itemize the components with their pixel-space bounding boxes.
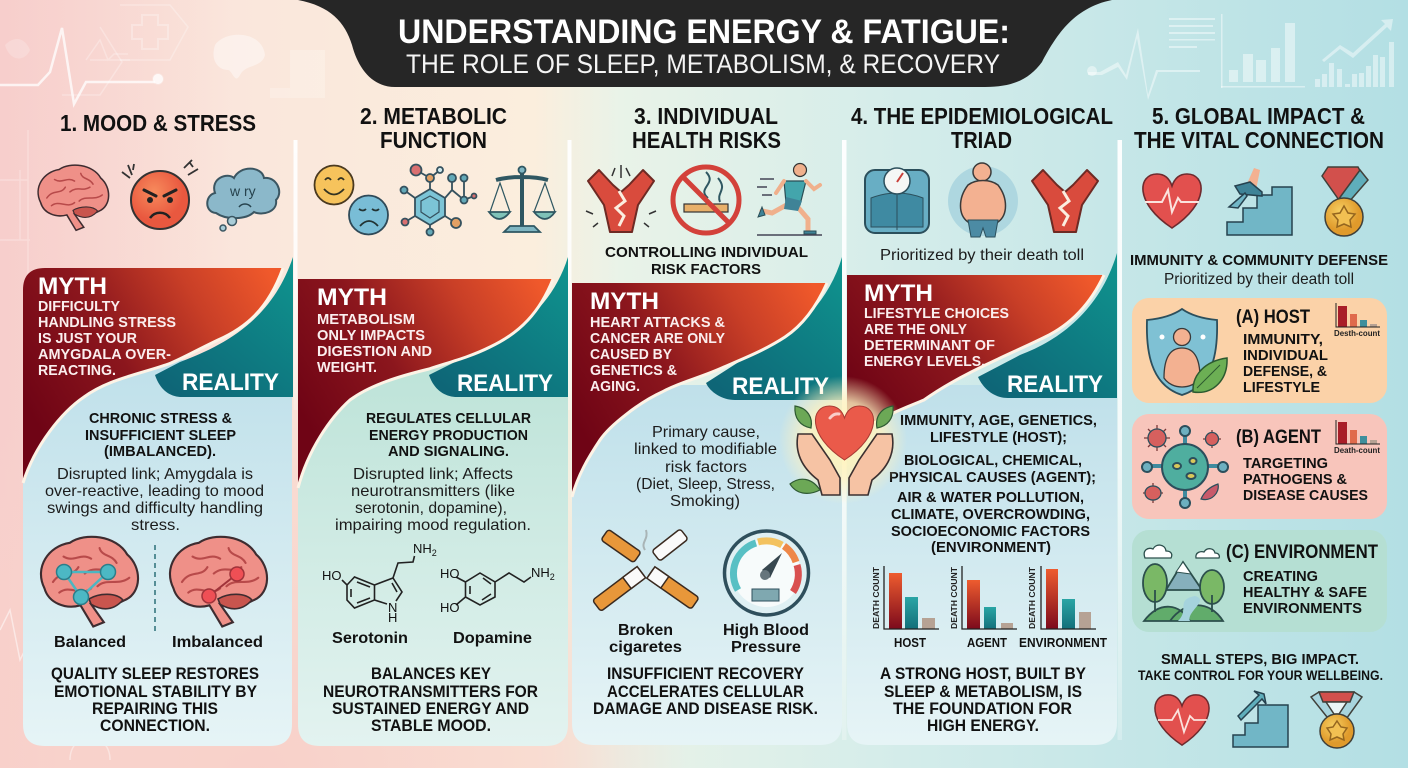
card text: environment [1243,568,1367,617]
reality text: REGULATES CELLULAR [366,410,531,427]
card text: host: INDIVIDUAL [1243,347,1328,364]
icon: brain [38,165,109,230]
reality text: ENERGY PRODUCTION [369,427,528,444]
icon: pathogens [1142,425,1228,508]
conclusion: HIGH ENERGY. [927,717,1039,735]
closing message: SMALL STEPS, BIG IMPACT. [1161,651,1359,668]
reality text: IMMUNITY, AGE, GENETICS, [900,412,1097,429]
reality text: CHRONIC STRESS & [89,410,232,427]
icon: balanced brain [41,537,138,627]
panel 5 heading [1134,103,1384,153]
reality text: neurotransmitters (like [351,483,515,500]
myth text: HANDLING STRESS [38,314,176,331]
reality text: stress. [131,517,180,534]
subheading: community defense [1130,252,1388,288]
subheading: risk factors: RISK FACTORS [651,261,761,278]
chart: environment: ENVIRONMENT [1019,635,1107,650]
chart: agent [950,566,1017,650]
myth text: WEIGHT. [317,359,377,376]
conclusion: NEUROTRANSMITTERS FOR [323,683,538,701]
mini chart: host: Desth-count [1334,329,1380,338]
subheading: risk factors [605,244,808,278]
conclusion: INSUFFICIENT RECOVERY [607,665,804,683]
myth label: MYTH [864,280,933,307]
diagram: dopamine: HO [440,600,460,615]
myth text: LIFESTYLE CHOICES [864,305,1009,322]
icon: runner [757,164,822,235]
card heading: host: (A) HOST [1236,307,1310,328]
card text: host [1243,331,1328,396]
myth text: DETERMINANT OF [864,337,995,354]
reality label: REALITY [457,370,553,397]
conclusion: SLEEP & METABOLISM, IS [884,683,1082,701]
myth text: ENERGY LEVELS. [864,353,985,370]
myth text: HEART ATTACKS & [590,314,725,331]
reality text: LIFESTYLE (HOST); [930,429,1067,446]
label: broken cigarettes: Broken [618,622,673,639]
diagram: dopamine [440,565,555,615]
panel 3 heading: 3. INDIVIDUAL [634,103,778,129]
icon: obese figure [948,163,1018,237]
reality text: impairing mood regulation. [335,517,531,534]
myth label: MYTH [38,273,107,300]
myth text: METABOLISM [317,311,415,328]
icon: molecule [400,164,476,236]
myth reality split [298,257,568,746]
reality text: CLIMATE, OVERCROWDING, [891,506,1090,523]
panel 4: the epidemiological triad [847,103,1117,745]
icon: no smoking [673,167,739,233]
mini chart: host [1334,303,1380,338]
card text: environment: CREATING [1243,568,1318,585]
myth reality split [847,253,1117,745]
myth text: CANCER ARE ONLY [590,330,725,347]
reality text [335,410,531,534]
card heading: agent: (B) AGENT [1236,427,1321,448]
myth text [38,298,176,379]
diagram: dopamine: HO [440,566,460,581]
diagram: serotonin: N [388,600,397,615]
panel 3 heading [632,103,781,153]
myth text: REACTING. [38,362,116,379]
reality text: swings and difficulty handling [47,500,263,517]
card text: agent: DISEASE CAUSES [1243,487,1368,504]
icon: shield [1147,309,1227,395]
reality text: AIR & WATER POLLUTION, [897,489,1084,506]
divider dashed [154,545,156,632]
reality text: risk factors [665,459,747,476]
reality label: REALITY [1007,371,1103,398]
decorative chart line art: top right [1087,14,1394,100]
subheading: community defense: Prioritized by their death toll [1164,271,1354,288]
conclusion: STABLE MOOD. [371,717,491,735]
reality text: serotonin, dopamine), [355,500,507,517]
title banner [298,0,1112,87]
reality text: Disrupted link; Amygdala is [57,466,253,483]
myth text: ARE THE ONLY [864,321,967,338]
card: agent [1132,414,1387,519]
closing message [1138,651,1383,683]
title line 1: UNDERSTANDING ENERGY & FATIGUE: [398,13,1010,51]
panel 1: mood and stress [23,110,293,746]
decorative medical line art: top left [0,5,226,760]
reality text [889,412,1097,556]
reality text: SOCIOECONOMIC FACTORS [891,523,1090,540]
reality text: BIOLOGICAL, CHEMICAL, [904,452,1082,469]
diagram: serotonin: NH [413,541,432,556]
icon: broken artery [586,165,656,232]
diagram: serotonin: 2 [432,548,437,558]
subheading: community defense: IMMUNITY & COMMUNITY DEFENSE [1130,252,1388,269]
icon: stairs with arrow [1233,691,1288,747]
chart: host: DEATH COUNT [872,567,881,629]
conclusion [323,665,538,735]
reality text: Disrupted link; Affects [353,466,513,483]
card text: host: DEFENSE, & [1243,363,1327,380]
decorative faint molecule cloud and pipes: top left [5,35,325,98]
diagram: dopamine: 2 [550,572,555,582]
card text: agent: PATHOGENS & [1243,471,1347,488]
conclusion: REPAIRING THIS [92,700,218,718]
conclusion: A STRONG HOST, BUILT BY [880,665,1086,683]
conclusion: QUALITY SLEEP RESTORES [51,665,259,683]
subheading: prioritized: Prioritized by their death toll [880,247,1084,264]
icon: balance scale [489,166,555,232]
myth text: CAUSED BY [590,346,672,363]
label: high blood pressure [723,622,809,656]
myth text [864,305,1009,370]
label: imbalanced: Imbalanced [172,634,263,651]
card text: environment: HEALTHY & SAFE [1243,584,1367,601]
subheading: risk factors: CONTROLLING INDIVIDUAL [605,244,808,261]
mini chart: agent [1334,420,1380,455]
myth label: MYTH [317,284,387,311]
reality text: (Diet, Sleep, Stress, [636,476,775,493]
icon: heart with pulse [1143,174,1201,228]
conclusion: CONNECTION. [100,717,210,735]
panel 2 heading [360,103,507,153]
reality text: PHYSICAL CAUSES (AGENT); [889,469,1096,486]
chart: host [872,566,939,650]
conclusion [51,665,259,735]
icon: worry cloud: w ry [229,183,256,199]
icon: heart in caring hands [779,376,907,504]
panel 2 heading: FUNCTION [380,127,487,153]
icon: broken cigarettes [592,529,699,611]
reality text [634,424,777,510]
icon: medal [1322,167,1368,236]
chart: agent: DEATH COUNT [950,567,959,629]
icon: sad face [349,196,388,234]
icon: imbalanced brain [170,537,267,627]
panel 3: individual health risks [572,103,842,745]
conclusion [593,665,818,718]
myth text: AMYGDALA OVER- [38,346,171,363]
myth text: AGING. [590,378,640,395]
label: high blood pressure: High Blood [723,622,809,639]
card text: agent [1243,455,1368,504]
conclusion [880,665,1086,735]
diagram: serotonin: H [388,610,397,625]
reality text: over-reactive, leading to mood [45,483,264,500]
chart: environment [1019,566,1107,650]
conclusion: DAMAGE AND DISEASE RISK. [593,700,818,718]
reality text [45,410,264,534]
panel 5 heading: 5. GLOBAL IMPACT & [1152,103,1365,129]
panel 2: metabolic function [298,103,568,746]
panel 5: global impact [1130,103,1388,748]
conclusion: BALANCES KEY [371,665,491,683]
chart: environment: DEATH COUNT [1028,567,1037,629]
conclusion: EMOTIONAL STABILITY BY [54,683,257,701]
icon: angry face [122,160,198,229]
panel 1 heading: 1. MOOD & STRESS [60,110,256,136]
title line 2: THE ROLE OF SLEEP, METABOLISM, & RECOVERY [406,49,1000,79]
icon: climbing stairs [1227,168,1292,235]
diagram: serotonin [322,541,437,625]
mini chart: agent: Death-count [1334,446,1380,455]
diagram: dopamine: NH [531,565,550,580]
label: high blood pressure: Pressure [731,639,801,656]
reality text: (ENVIRONMENT) [931,539,1051,556]
panel 4 heading [851,103,1113,153]
panel 4 heading: 4. THE EPIDEMIOLOGICAL [851,103,1113,129]
card text: agent: TARGETING [1243,455,1328,472]
panel 2 heading: 2. METABOLIC [360,103,507,129]
myth label: MYTH [590,288,659,315]
icon: weighing scale [865,168,929,233]
reality text: (IMBALANCED). [104,443,216,460]
reality label: REALITY [182,369,279,396]
column dividers [294,140,1122,740]
myth reality split [23,257,293,746]
myth text: ONLY IMPACTS [317,327,425,344]
panel 4 heading: TRIAD [951,127,1012,153]
myth text: IS JUST YOUR [38,330,137,347]
chart: host: HOST [894,635,926,650]
myth text [590,314,725,395]
panel 5 heading: THE VITAL CONNECTION [1134,127,1384,153]
reality text: Smoking) [670,493,740,510]
label: dopamine: Dopamine [453,630,532,647]
card text: host: IMMUNITY, [1243,331,1323,348]
icon: small heart [1155,695,1209,745]
icon: happy face [314,166,354,204]
card text: environment: ENVIRONMENTS [1243,600,1362,617]
card: host [1132,298,1387,403]
reality text: INSUFFICIENT SLEEP [85,427,236,444]
myth text [317,311,432,376]
label: balanced: Balanced [54,634,126,651]
reality text: AND SIGNALING. [388,443,509,460]
icon: broken artery [1032,170,1098,232]
icon: worry cloud [207,169,279,231]
conclusion: SUSTAINED ENERGY AND [332,700,529,718]
reality label: REALITY [732,373,829,400]
icon: landscape [1143,545,1224,621]
conclusion: ACCELERATES CELLULAR [607,683,804,701]
card heading: environment: (C) ENVIRONMENT [1226,542,1378,563]
myth text: DIFFICULTY [38,298,120,315]
conclusion: THE FOUNDATION FOR [893,700,1072,718]
label: broken cigarettes [609,622,682,656]
reality text: Primary cause, [652,424,760,441]
chart: agent: AGENT [967,635,1007,650]
reality text: linked to modifiable [634,441,777,458]
myth reality split [572,257,842,745]
icon: blood pressure gauge [724,531,808,615]
panel 3 heading: HEALTH RISKS [632,127,781,153]
myth text: DIGESTION AND [317,343,432,360]
label: serotonin: Serotonin [332,630,408,647]
myth text: GENETICS & [590,362,677,379]
card: environment [1132,530,1387,632]
diagram: serotonin: HO [322,568,342,583]
icon: small medal [1311,692,1362,748]
card text: host: LIFESTYLE [1243,379,1320,396]
label: broken cigarettes: cigaretes [609,639,682,656]
